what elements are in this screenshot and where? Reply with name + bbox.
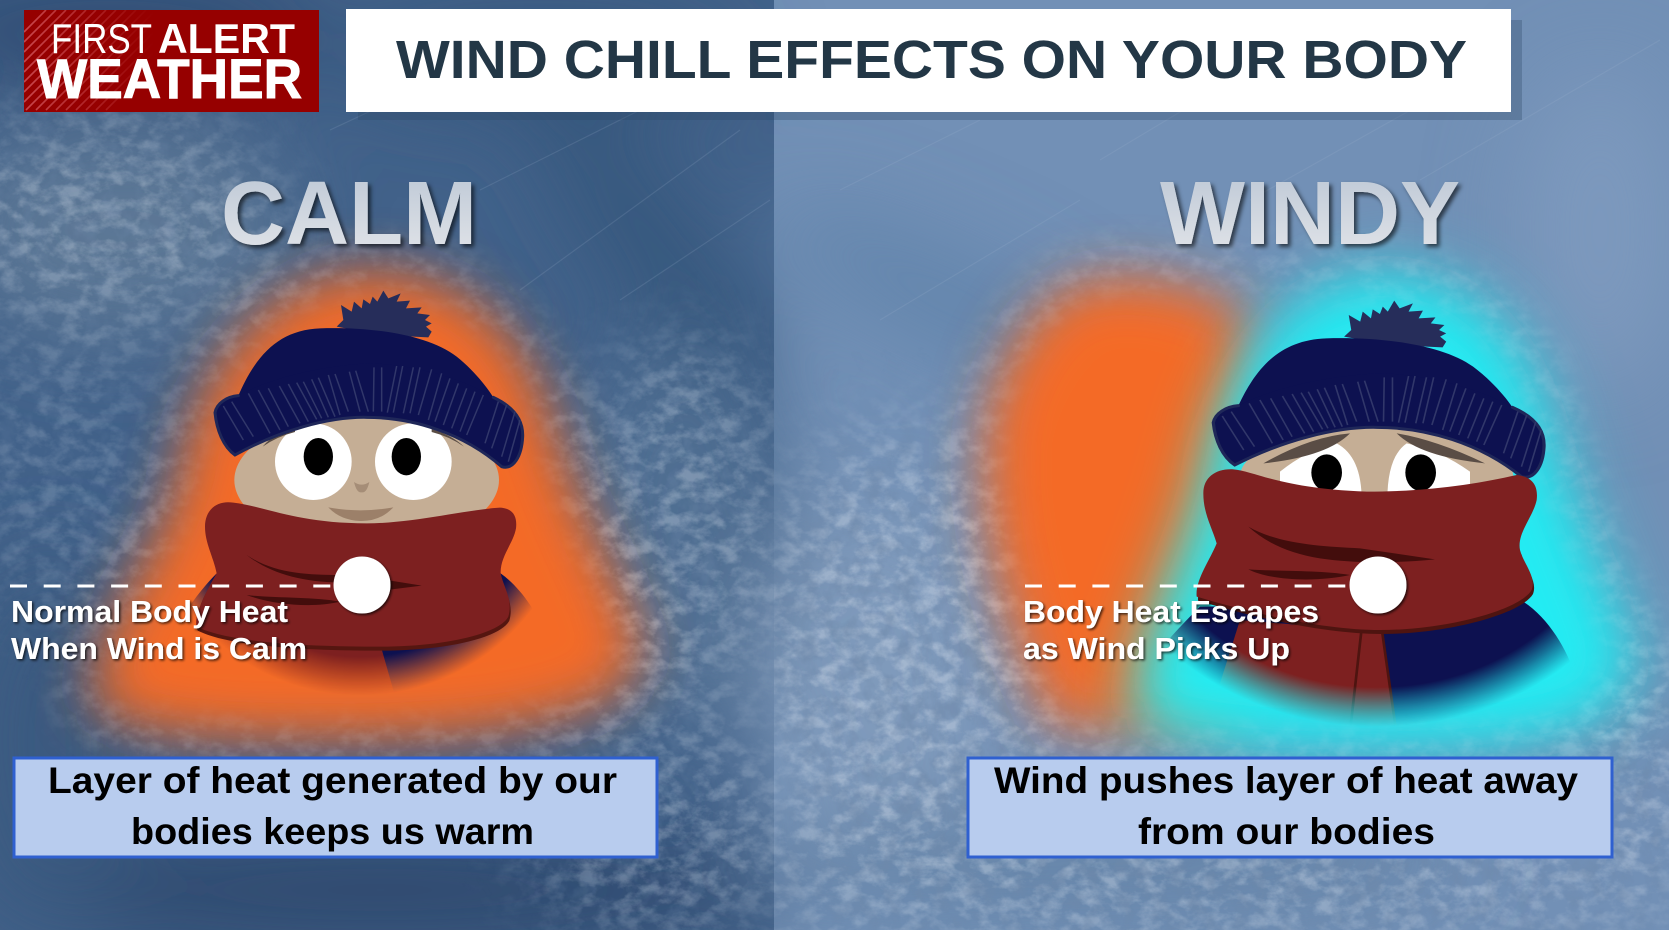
heading: calm: CALM — [221, 164, 477, 264]
logo: First Alert Weather: WEATHER — [37, 47, 302, 110]
faint cold halo: windy — [1130, 265, 1645, 753]
logo: First Alert Weather — [24, 10, 319, 112]
callout label: calm — [11, 594, 307, 666]
heat layer: windy, displaced orange — [984, 279, 1250, 729]
callout label: calm: Normal Body Heat — [11, 594, 288, 629]
caption box: windy: Wind pushes layer of heat away — [994, 760, 1578, 801]
callout label: windy — [1023, 594, 1319, 666]
caption box: windy: from our bodies — [1138, 811, 1435, 852]
caption box: windy — [968, 758, 1612, 857]
character: calm, happy bundled figure — [190, 290, 532, 692]
heading: windy: WINDY — [1160, 164, 1460, 264]
callout marker: windy — [1025, 556, 1406, 614]
caption box: calm — [14, 758, 657, 857]
frost overlay on heat edges — [48, 237, 1665, 756]
logo: First Alert Weather: FIRST — [51, 15, 152, 62]
title banner — [346, 9, 1522, 120]
logo: First Alert Weather: ALERT — [158, 15, 295, 62]
cold layer: windy, cyan — [1135, 285, 1621, 741]
caption box: calm: Layer of heat generated by our — [48, 760, 617, 801]
callout marker: calm — [10, 556, 390, 614]
caption box: calm: bodies keeps us warm — [131, 811, 534, 852]
heat layer: calm — [90, 272, 640, 738]
callout label: windy: as Wind Picks Up — [1023, 631, 1290, 666]
character: windy, worried bundled figure — [1166, 300, 1569, 726]
title banner: WIND CHILL EFFECTS ON YOUR BODY — [396, 30, 1467, 90]
callout label: windy: Body Heat Escapes — [1023, 594, 1319, 629]
callout label: calm: When Wind is Calm — [11, 631, 307, 666]
